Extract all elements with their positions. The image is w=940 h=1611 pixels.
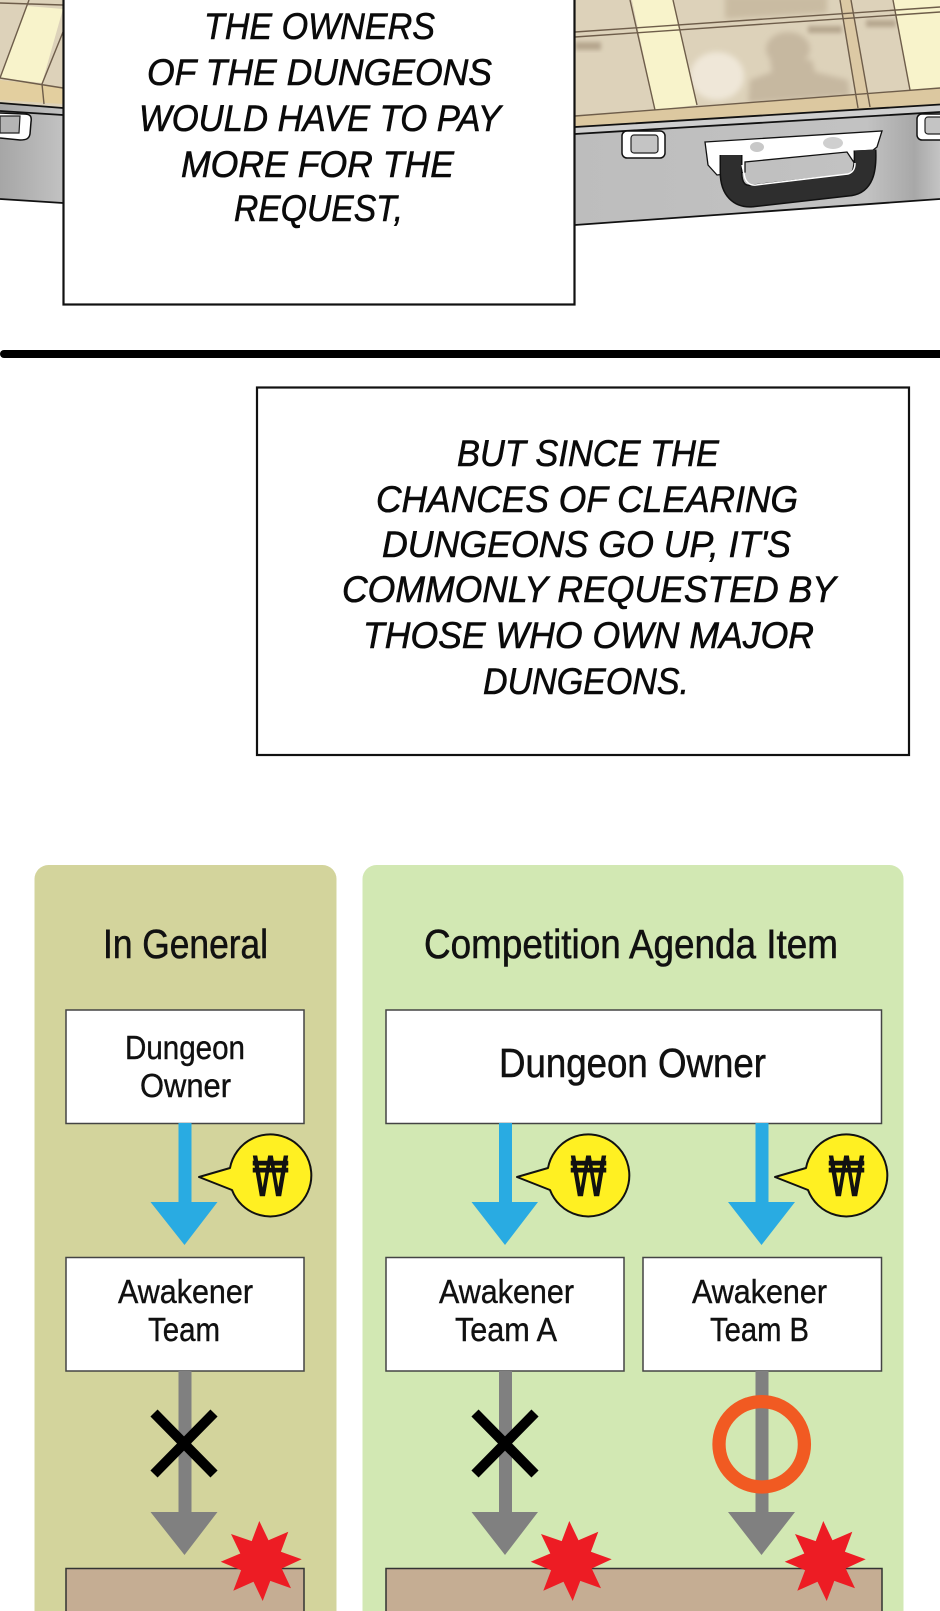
arrow: team A clearing — [472, 1371, 538, 1555]
text box: owners pay more: THE OWNERS — [204, 6, 435, 47]
text box: commonly requested: COMMONLY REQUESTED BY — [342, 569, 838, 610]
illustration: open briefcase right side — [575, 0, 940, 225]
box: awakener team: Team — [148, 1312, 220, 1349]
box: dungeon owner: Dungeon — [125, 1030, 245, 1067]
text box: commonly requested — [257, 388, 909, 755]
box: awakener team B: Awakener — [692, 1274, 827, 1311]
icon: won coin: ₩ — [252, 1146, 289, 1209]
arrow: team B clearing — [728, 1371, 795, 1555]
box: awakener team A: Team A — [455, 1312, 558, 1349]
text box: owners pay more: REQUEST, — [234, 188, 403, 229]
text box: commonly requested: DUNGEONS GO UP, IT'S — [382, 524, 791, 565]
panel: in general — [34, 865, 336, 1611]
heading: in general: In General — [103, 921, 268, 967]
icon: burst — [221, 1521, 302, 1601]
text box: commonly requested: DUNGEONS. — [483, 661, 689, 702]
icon: won coin A — [517, 1134, 629, 1216]
icon: won coin A: ₩ — [570, 1146, 607, 1209]
text box: commonly requested: CHANCES OF CLEARING — [376, 479, 798, 520]
arrow: clearing — [150, 1371, 218, 1555]
icon: burst team A — [531, 1521, 612, 1601]
arrow: payment — [150, 1123, 218, 1245]
icon: briefcase handle — [705, 131, 882, 196]
illustration: briefcase left side — [0, 0, 63, 203]
icon: won coin B: ₩ — [828, 1146, 865, 1209]
icon: briefcase clasp — [622, 131, 665, 158]
box: dungeon — [66, 1568, 304, 1611]
box: dungeon wide — [386, 1568, 882, 1611]
box: awakener team: Awakener — [118, 1274, 253, 1311]
text box: owners pay more: MORE FOR THE — [181, 144, 455, 185]
text box: owners pay more — [64, 0, 574, 304]
box: awakener team B: Team B — [710, 1312, 809, 1349]
text box: owners pay more: WOULD HAVE TO PAY — [139, 98, 503, 139]
box: dungeon owner — [66, 1010, 304, 1124]
box: awakener team — [66, 1258, 304, 1371]
icon: briefcase right clasp — [917, 114, 940, 140]
icon: burst team B — [785, 1521, 866, 1601]
box: awakener team A — [386, 1258, 624, 1371]
text box: owners pay more: OF THE DUNGEONS — [147, 52, 492, 93]
arrow: payment to team B — [728, 1123, 795, 1245]
panel divider bar — [0, 350, 940, 358]
box: awakener team B — [643, 1258, 882, 1371]
text box: commonly requested: BUT SINCE THE — [457, 433, 720, 474]
panel: competition agenda item — [362, 865, 904, 1611]
box: dungeon owner wide: Dungeon Owner — [499, 1040, 766, 1086]
icon: cross mark team A — [475, 1413, 535, 1474]
box: dungeon owner wide — [386, 1010, 882, 1124]
icon: circle mark team B — [719, 1402, 804, 1487]
text box: commonly requested: THOSE WHO OWN MAJOR — [363, 615, 814, 656]
arrow: payment to team A — [472, 1123, 538, 1245]
icon: won coin B — [775, 1134, 887, 1216]
box: dungeon owner: Owner — [140, 1068, 231, 1105]
box: awakener team A: Awakener — [439, 1274, 574, 1311]
icon: cross mark — [154, 1413, 214, 1474]
heading: competition agenda item: Competition Agenda Item — [424, 921, 838, 967]
icon: won coin — [199, 1134, 311, 1216]
